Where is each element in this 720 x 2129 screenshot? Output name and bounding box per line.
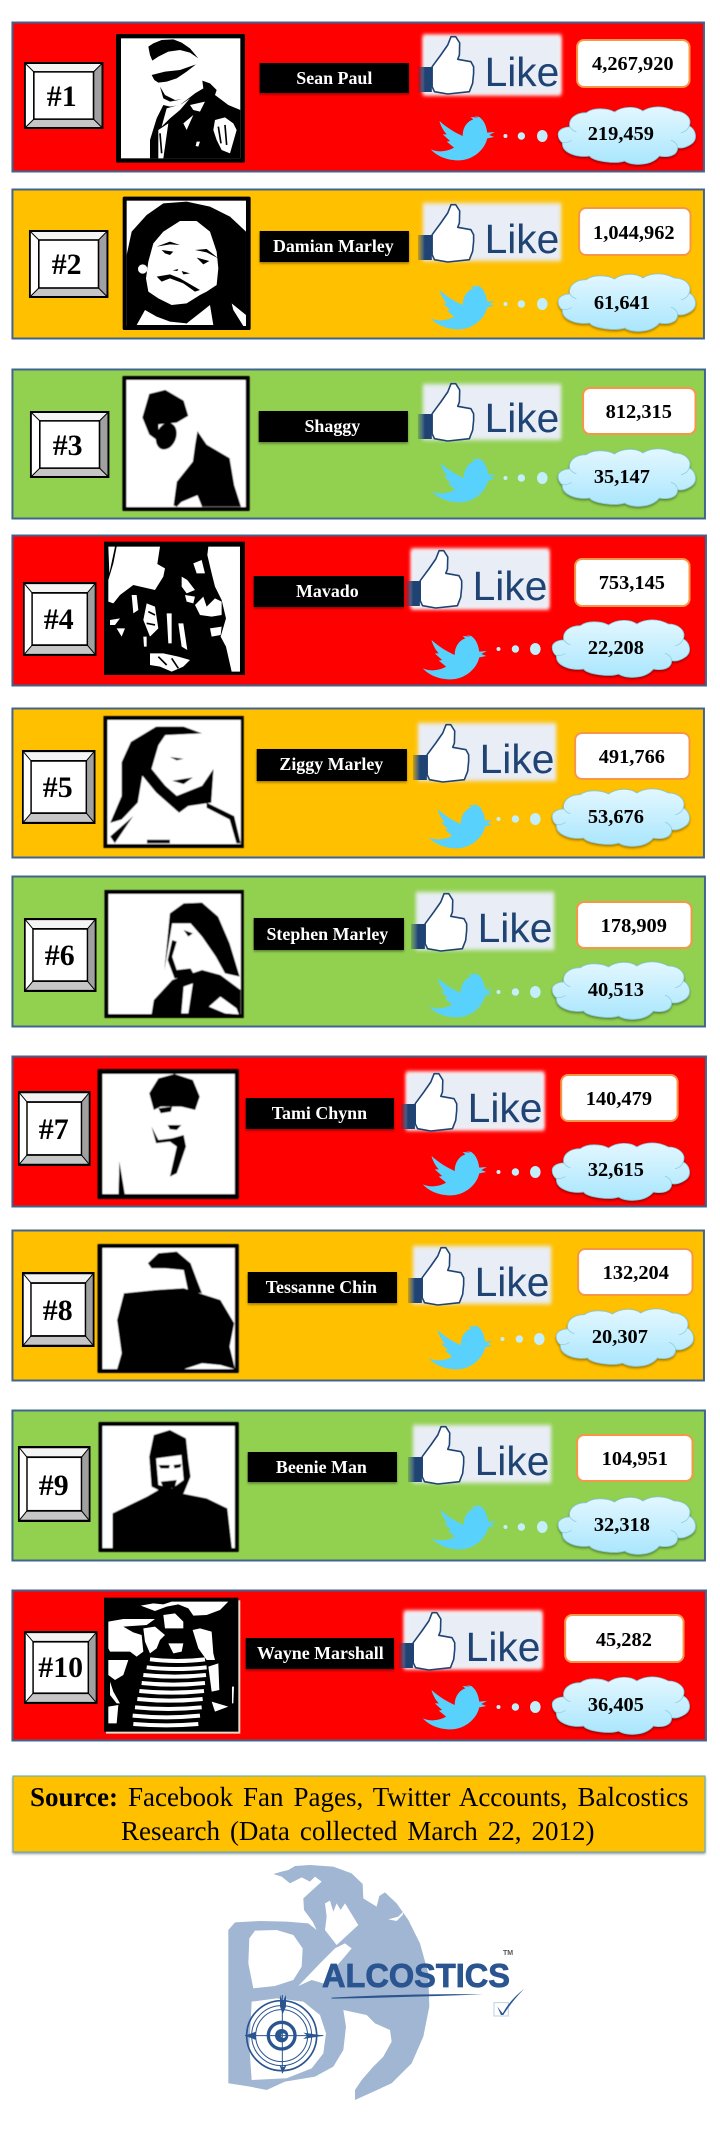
Twitter bird	[431, 116, 495, 160]
source note: Source: Facebook Fan Pages, Twitter Accounts, Balcostics	[30, 1782, 689, 1812]
Twitter bird	[429, 973, 493, 1017]
artist name: Tessanne Chin	[266, 1277, 377, 1297]
portrait: Sean Paul	[116, 34, 245, 163]
row 1: Sean Paul	[12, 22, 704, 172]
Facebook count: 45,282	[596, 1629, 652, 1651]
Twitter bird	[423, 1685, 487, 1729]
rank key #8	[22, 1272, 95, 1347]
rank key #7: #7	[39, 1113, 69, 1146]
portrait: Wayne Marshall	[104, 1598, 240, 1734]
Facebook count	[561, 1075, 678, 1121]
Twitter count cloud: 36,405	[588, 1694, 644, 1716]
Facebook like icon	[418, 203, 561, 262]
panel background	[12, 1230, 704, 1380]
rank key #8: #8	[43, 1294, 73, 1327]
Facebook count: 491,766	[599, 746, 665, 768]
source note	[13, 1776, 705, 1852]
rank key #10	[24, 1631, 98, 1704]
portrait: Tessanne Chin	[98, 1244, 239, 1373]
row 5: Ziggy Marley	[12, 708, 704, 858]
panel background	[12, 1590, 706, 1740]
Twitter count cloud	[558, 1497, 695, 1554]
Balcostics logo	[228, 1865, 524, 2100]
portrait: Mavado	[104, 542, 245, 675]
Twitter bird	[432, 458, 496, 502]
artist name: Tami Chynn	[272, 1103, 367, 1123]
Facebook like icon: Like	[466, 1624, 540, 1670]
Twitter count cloud	[558, 107, 695, 164]
rank key #6: #6	[45, 939, 75, 972]
Facebook like icon	[399, 1611, 542, 1670]
Facebook like icon	[408, 1425, 551, 1484]
thought dots	[497, 1166, 541, 1178]
Twitter count cloud	[552, 1677, 690, 1734]
artist name: Shaggy	[304, 416, 360, 436]
Twitter count cloud: 32,318	[594, 1514, 650, 1536]
rank key #4	[23, 582, 97, 656]
row 6: Stephen Marley	[12, 876, 705, 1026]
artist name: Sean Paul	[296, 68, 372, 88]
panel background	[12, 22, 704, 172]
Facebook like icon	[411, 892, 554, 951]
panel background	[12, 708, 704, 858]
Twitter count cloud	[552, 1143, 690, 1200]
Twitter bird	[429, 1325, 493, 1369]
rank key #1: #1	[47, 80, 77, 113]
rank key #2	[29, 230, 108, 298]
rank key #1	[24, 62, 103, 129]
Twitter count cloud: 53,676	[588, 806, 644, 828]
Twitter count cloud	[552, 620, 690, 677]
artist name: Stephen Marley	[266, 924, 388, 944]
Twitter bird	[431, 285, 495, 329]
Twitter bird	[429, 804, 493, 848]
Twitter count cloud: 35,147	[594, 466, 650, 488]
Facebook like icon	[413, 723, 556, 782]
row 10: Wayne Marshall	[12, 1590, 706, 1740]
Facebook like icon: Like	[485, 216, 559, 262]
source note: Research (Data collected March 22, 2012)	[121, 1816, 595, 1846]
thought dots	[503, 472, 548, 484]
Facebook like icon: Like	[485, 395, 559, 441]
rank key #9: #9	[39, 1469, 69, 1502]
artist name	[257, 749, 407, 781]
Facebook like icon	[418, 35, 561, 95]
rank key #5: #5	[43, 771, 73, 804]
Facebook count	[577, 902, 692, 948]
Twitter count cloud	[552, 962, 690, 1019]
artist name	[254, 576, 404, 607]
Twitter count cloud: 22,208	[588, 637, 644, 659]
row 2: Damian Marley	[12, 190, 704, 338]
panel background	[12, 536, 706, 686]
Facebook count: 812,315	[606, 401, 672, 423]
rank key #9	[18, 1446, 91, 1522]
artist name	[260, 231, 409, 262]
artist name	[248, 1452, 397, 1482]
Facebook count	[577, 40, 690, 87]
row 8: Tessanne Chin	[12, 1230, 704, 1380]
Twitter count cloud: 20,307	[592, 1326, 648, 1348]
portrait: Shaggy	[122, 376, 250, 511]
row 3: Shaggy	[12, 370, 705, 518]
Twitter count cloud	[552, 789, 690, 846]
Facebook count: 4,267,920	[592, 53, 674, 75]
thought dots	[500, 1333, 545, 1345]
artist name	[246, 1638, 394, 1669]
panel background	[12, 1410, 705, 1560]
Facebook count	[583, 388, 696, 434]
logo: globe and letter B	[228, 1865, 483, 2100]
Facebook like icon: Like	[473, 563, 547, 609]
Facebook like icon: Like	[475, 1259, 549, 1305]
logo: check box	[494, 1989, 524, 2016]
Facebook count	[565, 1615, 684, 1662]
thought dots	[503, 298, 548, 310]
rank key #3: #3	[53, 429, 83, 462]
Facebook count: 1,044,962	[593, 222, 675, 244]
Facebook like icon: Like	[485, 49, 559, 95]
panel background	[12, 370, 705, 518]
rank key #7	[18, 1091, 91, 1166]
rank key #5	[22, 750, 96, 824]
logo: trademark: TM	[503, 1950, 513, 1957]
Facebook count: 178,909	[601, 915, 667, 937]
rank key #10: #10	[38, 1651, 83, 1684]
logo: wordmark: ALCOSTICS	[322, 1957, 510, 1994]
thought dots	[497, 986, 541, 998]
artist name	[260, 63, 409, 93]
Twitter count cloud	[558, 449, 695, 506]
ranked artist rows	[12, 22, 706, 1740]
Twitter count cloud: 219,459	[588, 123, 654, 145]
row 4: Mavado	[12, 536, 706, 686]
rank key #3	[30, 411, 109, 478]
artist name: Mavado	[296, 581, 359, 601]
Twitter bird	[423, 1151, 487, 1195]
Twitter bird	[432, 1505, 496, 1549]
row 9: Beenie Man	[12, 1410, 705, 1560]
Twitter count cloud: 40,513	[588, 979, 644, 1001]
Facebook count	[578, 1249, 693, 1295]
artist name: Wayne Marshall	[257, 1643, 384, 1663]
portrait: Damian Marley	[123, 197, 251, 330]
Twitter count cloud	[558, 274, 695, 331]
Twitter count cloud: 61,641	[594, 292, 650, 314]
artist name	[248, 1272, 397, 1303]
rank key #6	[24, 918, 97, 992]
Facebook count	[575, 733, 690, 779]
artist name: Damian Marley	[273, 236, 394, 256]
Facebook count: 753,145	[599, 572, 665, 594]
panel background	[12, 876, 705, 1026]
Facebook like icon: Like	[475, 1438, 549, 1484]
Facebook like icon: Like	[480, 736, 554, 782]
thought dots	[503, 130, 548, 142]
Twitter bird	[423, 635, 487, 679]
Facebook like icon	[408, 1246, 551, 1305]
Facebook count: 140,479	[586, 1088, 652, 1110]
Facebook count: 104,951	[602, 1448, 668, 1470]
portrait: Ziggy Marley	[103, 716, 244, 848]
Facebook like icon	[418, 384, 561, 441]
artist name	[254, 918, 404, 950]
Facebook like icon: Like	[468, 1085, 542, 1131]
rank key #4: #4	[44, 603, 74, 636]
artist name	[259, 411, 408, 442]
Twitter count cloud	[556, 1309, 693, 1366]
rank key #2: #2	[52, 248, 82, 281]
artist name	[246, 1098, 394, 1129]
Facebook like icon: Like	[478, 905, 552, 951]
Facebook like icon	[406, 549, 549, 609]
thought dots	[497, 813, 541, 825]
logo: target crosshair	[245, 1995, 324, 2073]
Twitter count cloud: 32,615	[588, 1159, 644, 1181]
Facebook count	[577, 1435, 693, 1481]
Facebook like icon	[401, 1072, 544, 1131]
artist name: Beenie Man	[276, 1457, 367, 1477]
Facebook count	[575, 559, 690, 606]
thought dots	[497, 1701, 541, 1713]
portrait: Tami Chynn	[98, 1069, 239, 1199]
panel background	[12, 1056, 706, 1206]
thought dots	[497, 643, 541, 655]
portrait: Stephen Marley	[104, 890, 244, 1018]
row 7: Tami Chynn	[12, 1056, 706, 1206]
portrait: Beenie Man	[99, 1422, 239, 1552]
Facebook count: 132,204	[603, 1262, 669, 1284]
panel background	[12, 190, 704, 338]
thought dots	[503, 1521, 548, 1533]
artist name: Ziggy Marley	[279, 754, 383, 774]
Facebook count	[579, 208, 691, 255]
